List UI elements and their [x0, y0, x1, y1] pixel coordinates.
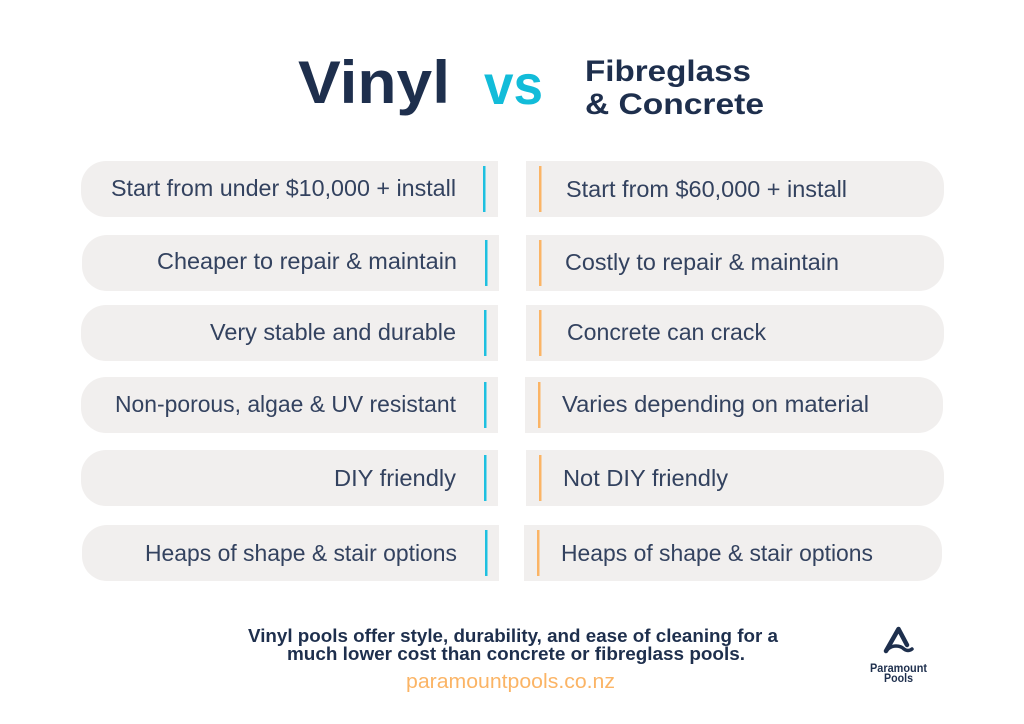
row: fibreglass price: [526, 161, 944, 217]
heading: Fibreglass & Concrete: [585, 55, 764, 121]
row: vinyl stability: [81, 305, 498, 361]
row: vinyl DIY: DIY friendly: [334, 465, 457, 491]
website link: paramountpools.co.nz: [406, 671, 615, 693]
summary text: [248, 626, 779, 664]
heading: Vinyl: Vinyl: [298, 49, 450, 116]
row: fibreglass repair: Costly to repair & maintain: [565, 249, 839, 275]
logo: Paramount Pools: [870, 629, 927, 685]
row: fibreglass DIY: [526, 450, 944, 506]
row: vinyl repair: Cheaper to repair & maintain: [157, 248, 457, 274]
logo: Paramount Pools: Paramount: [870, 661, 927, 675]
row: fibreglass DIY: Not DIY friendly: [563, 465, 729, 491]
row: vinyl resistance: [81, 377, 498, 433]
row: fibreglass cracking: Concrete can crack: [567, 319, 767, 345]
row: vinyl DIY: [81, 450, 498, 506]
row: fibreglass cracking: [526, 305, 944, 361]
title: [298, 49, 764, 121]
row: vinyl repair: [82, 235, 499, 291]
row: vinyl resistance: Non-porous, algae & UV resistant: [115, 391, 457, 417]
row: vinyl shapes: [82, 525, 499, 581]
row: vinyl price: [81, 161, 498, 217]
summary text: Vinyl pools offer style, durability, and ease of cleaning for a: [248, 626, 779, 646]
row: fibreglass price: Start from $60,000 + install: [566, 176, 847, 202]
panel: vinyl column: [81, 161, 499, 581]
heading: Fibreglass & Concrete: & Concrete: [585, 88, 764, 121]
row: vinyl shapes: Heaps of shape & stair options: [145, 540, 457, 566]
summary text: much lower cost than concrete or fibreglass pools.: [287, 644, 745, 664]
icon: pool peak: [886, 629, 912, 651]
row: fibreglass shapes: [524, 525, 942, 581]
row: fibreglass material: Varies depending on material: [562, 391, 869, 417]
row: vinyl stability: Very stable and durable: [210, 319, 456, 345]
row: fibreglass repair: [526, 235, 944, 291]
row: fibreglass shapes: Heaps of shape & stair options: [561, 540, 873, 566]
panel: fibreglass and concrete column: [524, 161, 944, 581]
heading: Fibreglass & Concrete: Fibreglass: [585, 55, 751, 88]
row: vinyl price: Start from under $10,000 + install: [111, 175, 456, 201]
logo: Paramount Pools: Pools: [884, 671, 913, 685]
row: fibreglass material: [525, 377, 943, 433]
heading: vs: vs: [484, 53, 543, 116]
